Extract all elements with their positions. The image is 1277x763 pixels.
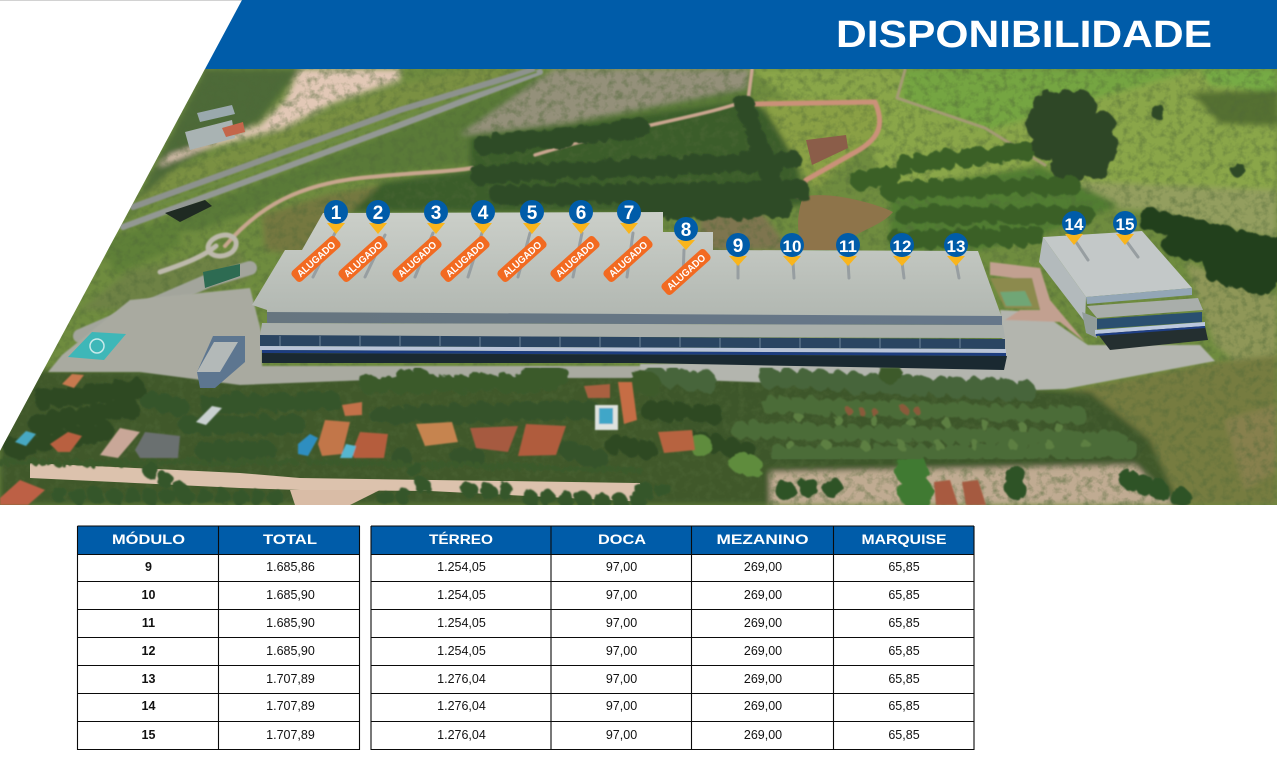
tag: module 5: ALUGADO [501, 240, 544, 280]
houses and pools [0, 374, 986, 505]
marker 5 [520, 200, 544, 234]
marker 13: 13 [947, 237, 965, 256]
module rows: 14 [142, 699, 155, 713]
marker 4 [471, 200, 495, 234]
title: DISPONIBILIDADE [836, 14, 1212, 56]
module rows: 1.685,90 [266, 644, 315, 658]
roadside sheds [185, 105, 245, 150]
area rows: 1.254,05 [437, 616, 486, 630]
marker 15 [1113, 211, 1137, 245]
area rows [437, 560, 920, 742]
roof skylights [313, 233, 1138, 278]
marker 8 [674, 217, 698, 250]
table: area breakdown [371, 526, 974, 750]
marker 12 [890, 233, 914, 266]
marker 11 [836, 233, 860, 266]
main warehouse [252, 212, 1007, 370]
marker 10 [780, 233, 804, 266]
area rows: 97,00 [606, 672, 637, 686]
header row [429, 532, 946, 547]
marker 12: 12 [893, 237, 911, 256]
area rows: 1.254,05 [437, 644, 486, 658]
marker 11: 11 [839, 237, 857, 256]
area rows: 65,85 [888, 699, 920, 713]
module rows: 15 [142, 728, 155, 742]
area rows: 65,85 [888, 588, 920, 602]
marker 6 [569, 200, 593, 234]
module rows [142, 560, 315, 742]
red soil patch [806, 135, 848, 165]
area rows: 1.276,04 [437, 672, 486, 686]
area rows: 97,00 [606, 616, 637, 630]
plaza and truck yard pavement [48, 262, 1215, 391]
header row: MARQUISE [862, 532, 946, 547]
module rows: 1.685,90 [266, 616, 315, 630]
area rows: 97,00 [606, 728, 637, 742]
area rows: 269,00 [744, 616, 782, 630]
area rows: 65,85 [888, 644, 920, 658]
table: module and total [77, 526, 360, 750]
area rows: 269,00 [744, 699, 782, 713]
area rows: 269,00 [744, 728, 782, 742]
area rows: 65,85 [888, 672, 920, 686]
dirt roads and highway [80, 70, 1045, 336]
area rows: 97,00 [606, 560, 637, 574]
pond [798, 195, 893, 250]
texture overlay [0, 69, 1277, 505]
marker 1: 1 [331, 203, 342, 224]
rented tags [290, 234, 712, 297]
marker 13 [944, 233, 968, 266]
header row: MÓDULO [112, 532, 185, 547]
area rows: 97,00 [606, 588, 637, 602]
header row: DOCA [598, 532, 646, 547]
marker 3: 3 [431, 203, 441, 224]
module rows: 11 [142, 616, 155, 630]
gatehouse [197, 336, 245, 388]
marker 9 [726, 233, 750, 266]
terrain: fields and ground [0, 69, 1277, 505]
aerial photo of the logistics park [0, 69, 1277, 505]
tag: module 8: ALUGADO [665, 253, 708, 293]
entrance sign [203, 264, 240, 288]
module rows: 10 [142, 588, 155, 602]
area rows: 1.254,05 [437, 588, 486, 602]
tag: module 1: ALUGADO [295, 240, 338, 280]
module rows: 13 [142, 672, 155, 686]
marker 3 [424, 200, 448, 234]
module rows: 1.685,90 [266, 588, 315, 602]
marker 8: 8 [681, 220, 691, 241]
area rows: 269,00 [744, 588, 782, 602]
area rows: 1.276,04 [437, 728, 486, 742]
warehouse: modules 14 and 15 [1039, 231, 1208, 350]
module rows: 1.707,89 [266, 728, 315, 742]
module rows: 12 [142, 644, 155, 658]
marker 4: 4 [478, 203, 489, 224]
header row: TÉRREO [429, 532, 493, 547]
marker 7 [617, 200, 641, 234]
tag: module 7: ALUGADO [607, 240, 650, 280]
tag: module 3: ALUGADO [396, 240, 439, 280]
area rows: 97,00 [606, 644, 637, 658]
marker 1 [324, 200, 348, 234]
module rows: 9 [145, 560, 152, 574]
tag: module 4: ALUGADO [444, 240, 487, 280]
module rows: 1.685,86 [266, 560, 315, 574]
marker 14 [1062, 211, 1086, 245]
area rows: 65,85 [888, 728, 920, 742]
area rows: 269,00 [744, 560, 782, 574]
marker 14: 14 [1065, 215, 1084, 234]
header row: MEZANINO [716, 532, 808, 547]
trees overlapping the pavement [370, 372, 1130, 455]
area rows: 1.276,04 [437, 699, 486, 713]
area rows: 269,00 [744, 644, 782, 658]
marker 6: 6 [576, 203, 586, 224]
marker 9: 9 [733, 236, 743, 257]
tag: module 2: ALUGADO [342, 240, 385, 280]
marker 15: 15 [1116, 215, 1134, 234]
bridge shadow [165, 200, 212, 222]
lower road [30, 463, 645, 502]
area rows: 65,85 [888, 560, 920, 574]
marker 2 [366, 200, 390, 234]
marker 2: 2 [373, 203, 383, 224]
title banner [205, 0, 1277, 69]
module markers [324, 200, 1137, 266]
header row [112, 532, 317, 547]
area rows: 269,00 [744, 672, 782, 686]
module rows: 1.707,89 [266, 699, 315, 713]
header row: TOTAL [263, 532, 317, 547]
marker 7: 7 [624, 203, 634, 224]
area rows: 65,85 [888, 616, 920, 630]
helipad [68, 332, 126, 360]
vegetation clusters [0, 105, 1277, 502]
area rows: 1.254,05 [437, 560, 486, 574]
marker 10: 10 [783, 237, 801, 256]
area rows: 97,00 [606, 699, 637, 713]
module rows: 1.707,89 [266, 672, 315, 686]
marker 5: 5 [527, 203, 538, 224]
tag: module 6: ALUGADO [554, 240, 597, 280]
